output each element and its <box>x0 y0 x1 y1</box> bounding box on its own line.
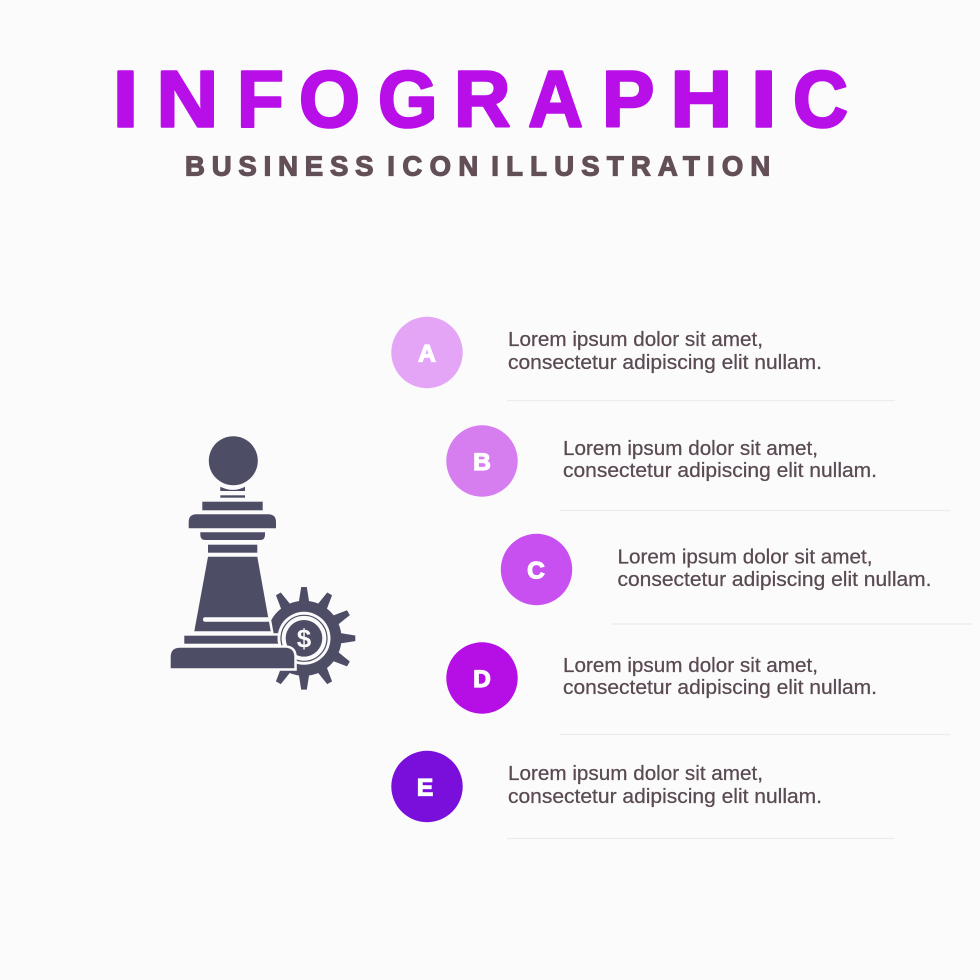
badge B <box>446 425 518 497</box>
text C <box>618 546 932 591</box>
title: C <box>793 54 848 144</box>
title: N <box>156 54 218 144</box>
badge D <box>446 642 518 714</box>
subtitle: ICON <box>387 150 478 182</box>
text C: Lorem ipsum dolor sit amet, <box>618 546 872 568</box>
badge A: A <box>418 340 436 368</box>
text D <box>563 655 877 699</box>
title <box>112 54 848 144</box>
icon: gear with teeth <box>266 587 355 690</box>
subtitle: ILLUSTRATION <box>491 150 770 182</box>
title: F <box>237 54 284 144</box>
item C <box>501 534 972 624</box>
badge D: D <box>473 666 491 693</box>
title: I <box>751 54 777 144</box>
title: P <box>602 54 654 144</box>
title: O <box>299 54 360 144</box>
text E: Lorem ipsum dolor sit amet, <box>508 763 763 785</box>
text A: consectetur adipiscing elit nullam. <box>508 352 822 374</box>
title: H <box>670 54 732 144</box>
text B: Lorem ipsum dolor sit amet, <box>563 438 818 460</box>
badge E: E <box>417 774 433 802</box>
item A <box>391 317 895 400</box>
item D <box>446 642 950 734</box>
text D: Lorem ipsum dolor sit amet, <box>563 655 818 677</box>
text E <box>508 763 822 808</box>
badge A <box>391 317 463 388</box>
badge E <box>391 751 463 822</box>
text C: consectetur adipiscing elit nullam. <box>618 569 932 591</box>
icon: dollar coin: $ <box>297 624 312 654</box>
icon: dollar coin <box>278 612 330 665</box>
text B <box>563 438 877 482</box>
text A: Lorem ipsum dolor sit amet, <box>508 329 763 351</box>
icon: chess tower body <box>184 557 281 644</box>
badge C <box>501 534 572 605</box>
icon: chess pawn top <box>189 436 276 622</box>
text A <box>508 329 822 374</box>
subtitle <box>185 150 770 182</box>
text B: consectetur adipiscing elit nullam. <box>563 460 877 482</box>
item B <box>446 425 950 510</box>
title: G <box>378 54 438 144</box>
icon: chess base <box>171 648 294 668</box>
badge B: B <box>473 449 491 476</box>
subtitle: BUSINESS <box>185 150 374 182</box>
item E <box>391 751 895 838</box>
text E: consectetur adipiscing elit nullam. <box>508 786 822 808</box>
badge C: C <box>527 558 545 584</box>
text D: consectetur adipiscing elit nullam. <box>563 677 877 699</box>
title: A <box>528 54 583 144</box>
title: R <box>454 54 510 144</box>
title: I <box>112 54 138 144</box>
icon: chess pawn with dollar gear <box>171 436 355 690</box>
